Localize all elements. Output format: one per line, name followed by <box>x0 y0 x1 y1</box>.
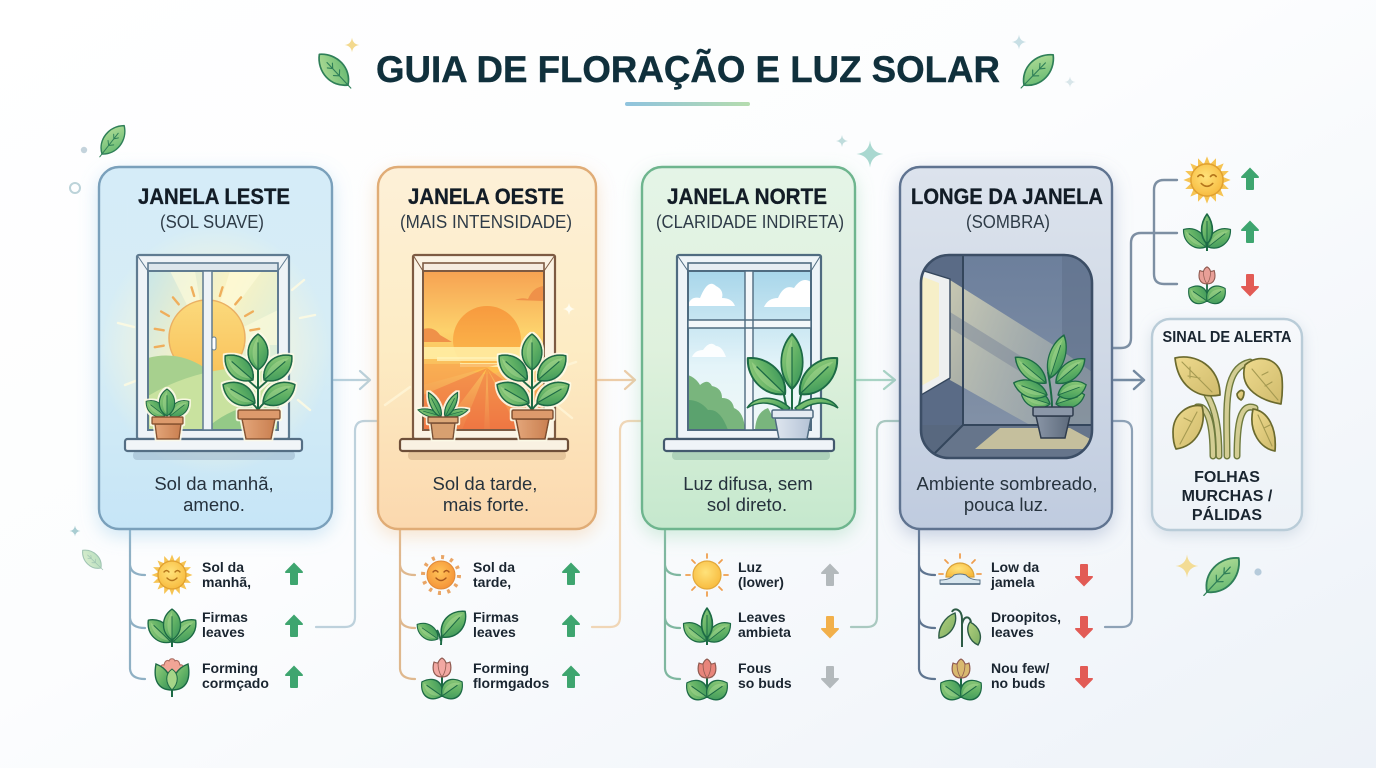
label: sol da manhã: manhã, <box>202 574 251 590</box>
arrow up grey <box>821 564 839 586</box>
icon: tan bud <box>935 659 987 705</box>
label: leaves ambieta: ambieta <box>738 624 791 640</box>
list: longe da janela <box>935 554 1093 705</box>
icon: leaves <box>679 608 735 647</box>
description: Sol da manhã, <box>154 473 274 494</box>
heading: LONGE DA JANELA <box>911 184 1103 209</box>
icon: sun <box>1183 156 1231 204</box>
large plant <box>492 334 574 439</box>
title underline <box>625 102 750 106</box>
decorative sparkles and dots <box>70 34 1262 603</box>
alert caption: PÁLIDAS <box>1192 505 1262 524</box>
label: droopitos leaves: Droopitos, <box>991 609 1061 625</box>
room illustration: shade <box>921 255 1092 458</box>
icon: low sun <box>939 554 981 584</box>
heading: JANELA NORTE <box>667 184 827 209</box>
list: janela leste <box>142 554 303 697</box>
icon: wilted plant <box>1173 357 1282 456</box>
icon: smiling sun <box>152 554 192 596</box>
icon: droopy leaves <box>939 609 980 647</box>
label: droopitos leaves: leaves <box>991 624 1034 640</box>
arrow up <box>285 614 303 637</box>
label: sol da tarde: tarde, <box>473 574 511 590</box>
window illustration: sunset <box>385 255 576 460</box>
small plant <box>142 389 193 439</box>
heading: SINAL DE ALERTA <box>1162 329 1292 346</box>
alert caption: FOLHAS <box>1194 469 1260 486</box>
small plant <box>417 391 469 439</box>
icon: leaves <box>1179 214 1235 253</box>
icon: title leaf left <box>312 47 359 95</box>
alert caption: MURCHAS / <box>1182 488 1273 505</box>
window illustration: indirect light <box>664 255 845 460</box>
arrow up: leaves <box>1241 220 1259 243</box>
subheading: (CLARIDADE INDIRETA) <box>656 212 844 232</box>
icon: orange sun <box>423 557 459 593</box>
description: Ambiente sombreado, <box>916 473 1098 494</box>
icon: plain sun <box>686 554 728 596</box>
description: mais forte. <box>443 494 529 515</box>
icon: flower <box>1184 267 1230 308</box>
arrow up <box>285 562 303 585</box>
label: firmas leaves: leaves <box>202 624 245 640</box>
arrow up <box>562 614 580 637</box>
icon: tulip <box>416 658 468 704</box>
label: nou few no buds: no buds <box>991 675 1046 691</box>
arrow down <box>1075 666 1093 688</box>
panel: janela norte <box>642 167 855 529</box>
icon: red tulip <box>681 659 733 705</box>
label: fous so buds: so buds <box>738 675 792 691</box>
panel: sinal de alerta <box>1152 319 1302 530</box>
arrow down <box>1075 564 1093 586</box>
label: luz lower: Luz <box>738 559 762 575</box>
large plant <box>218 334 300 439</box>
description: ameno. <box>183 494 245 515</box>
label: sol da manhã: Sol da <box>202 559 244 575</box>
label: firmas leaves: Firmas <box>202 609 248 625</box>
indicators: top right summary <box>1179 156 1259 308</box>
large plant <box>740 334 845 439</box>
title: GUIA DE FLORAÇÃO E LUZ SOLAR <box>376 48 1000 90</box>
label: fous so buds: Fous <box>738 660 772 676</box>
label: forming flormgados: Forming <box>473 660 529 676</box>
icon: leaves <box>142 609 202 648</box>
arrow up: sun <box>1241 168 1259 190</box>
icon: title leaf right <box>1014 47 1061 95</box>
panel: janela oeste <box>378 167 596 529</box>
description: Sol da tarde, <box>433 473 537 494</box>
connectors: lines between panels <box>130 180 1177 679</box>
description: sol direto. <box>707 494 787 515</box>
arrow down amber <box>821 616 839 638</box>
subheading: (SOMBRA) <box>966 212 1050 232</box>
label: leaves ambieta: Leaves <box>738 609 786 625</box>
subheading: (SOL SUAVE) <box>160 212 264 232</box>
arrow down grey <box>821 666 839 688</box>
icon: two leaves <box>413 605 472 645</box>
arrow up <box>562 562 580 585</box>
label: low da jamela: jamela <box>990 574 1035 590</box>
plant <box>1010 333 1090 438</box>
label: firmas leaves: Firmas <box>473 609 519 625</box>
list: janela oeste <box>413 557 580 704</box>
list: janela norte <box>679 554 839 705</box>
label: forming começado: Forming <box>202 660 258 676</box>
arrow up <box>562 666 580 688</box>
label: nou few no buds: Nou few/ <box>991 660 1049 676</box>
label: firmas leaves: leaves <box>473 624 516 640</box>
label: forming flormgados: flormgados <box>473 675 549 691</box>
panel: longe da janela <box>900 167 1112 529</box>
description: Luz difusa, sem <box>683 473 813 494</box>
panel: janela leste <box>99 167 332 529</box>
subheading: (MAIS INTENSIDADE) <box>400 212 572 232</box>
label: low da jamela: Low da <box>991 559 1039 575</box>
label: luz lower: (lower) <box>738 574 784 590</box>
label: forming começado: cormçado <box>202 675 269 691</box>
window illustration: sunrise <box>118 255 315 460</box>
heading: JANELA LESTE <box>138 184 290 209</box>
arrow down <box>1075 616 1093 638</box>
description: pouca luz. <box>964 494 1048 515</box>
label: sol da tarde: Sol da <box>473 559 515 575</box>
icon: flower forming <box>155 659 189 697</box>
arrow down: flower <box>1241 274 1259 296</box>
heading: JANELA OESTE <box>408 184 564 209</box>
arrow up <box>285 666 303 688</box>
